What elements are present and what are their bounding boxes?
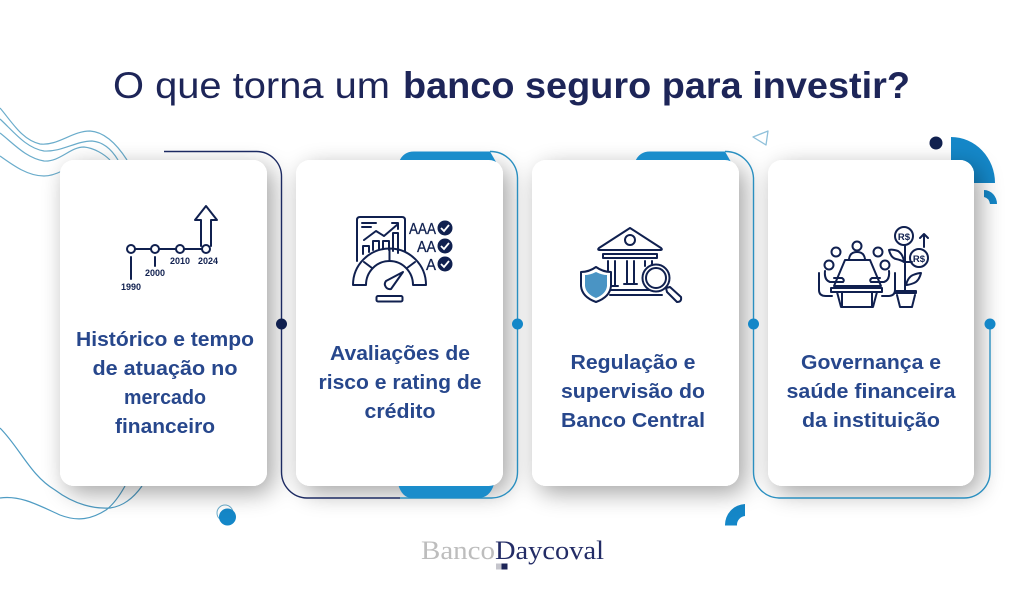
- text: governança: Governança e: [801, 351, 941, 374]
- text: avaliações: risco e rating de: [318, 371, 482, 394]
- panel: avaliações: [296, 160, 503, 486]
- connector: blue line second card: [400, 151, 523, 498]
- decoration: bottom-left waves: [0, 428, 142, 519]
- text: histórico: de atuação no: [92, 357, 238, 380]
- decoration: bottom circle: [217, 505, 236, 526]
- text: regulação: Banco Central: [561, 409, 705, 432]
- logo: Banco Daycoval: Banco: [421, 536, 495, 565]
- icon: timeline: 2010: [170, 256, 190, 266]
- icon: timeline: 2000: [145, 268, 165, 278]
- title: O que torna um: [113, 65, 390, 106]
- connector: navy line: [164, 151, 400, 498]
- text: governança: [786, 351, 956, 432]
- title: [113, 65, 910, 106]
- logo: Banco Daycoval: Daycoval: [495, 536, 604, 565]
- connector: blue line third and fourth cards: [725, 151, 996, 498]
- text: regulação: supervisão do: [561, 380, 705, 403]
- decoration: top-left waves: [0, 108, 127, 176]
- decoration: top-right quarter rings and dot: [753, 131, 997, 204]
- logo: Banco Daycoval: [421, 536, 604, 570]
- blue tabs: [398, 152, 731, 498]
- icon: rating gauge: [353, 217, 452, 302]
- icon: rating gauge: AAA: [409, 221, 436, 238]
- icon: timeline: 2024: [198, 256, 218, 266]
- text: histórico: [76, 328, 254, 438]
- text: histórico: mercado: [124, 386, 206, 409]
- panel: governança: [768, 160, 974, 486]
- icon: timeline: 1990: [121, 282, 141, 292]
- text: regulação: [561, 351, 705, 432]
- icon: meeting and money plant: R$: [898, 232, 911, 243]
- text: avaliações: Avaliações de: [330, 342, 470, 365]
- text: avaliações: crédito: [364, 400, 436, 423]
- icon: timeline: [121, 206, 218, 292]
- text: histórico: Histórico e tempo: [76, 328, 254, 351]
- text: avaliações: [318, 342, 482, 423]
- card shadows: [60, 160, 974, 486]
- icon: rating gauge: AA: [417, 239, 436, 256]
- panel: histórico: [60, 160, 267, 486]
- title: banco seguro para investir?: [403, 65, 910, 106]
- icon: bank, shield and magnifier: [581, 228, 681, 302]
- decoration: bottom quarter ring: [725, 504, 745, 526]
- text: governança: da instituição: [802, 409, 940, 432]
- panel: regulação: [532, 160, 739, 486]
- text: governança: saúde financeira: [786, 380, 956, 403]
- icon: meeting and money plant: R$: [913, 254, 926, 265]
- text: regulação: Regulação e: [570, 351, 696, 374]
- text: histórico: financeiro: [115, 415, 215, 438]
- icon: meeting and money plant: [819, 227, 928, 307]
- icon: rating gauge: A: [426, 257, 436, 274]
